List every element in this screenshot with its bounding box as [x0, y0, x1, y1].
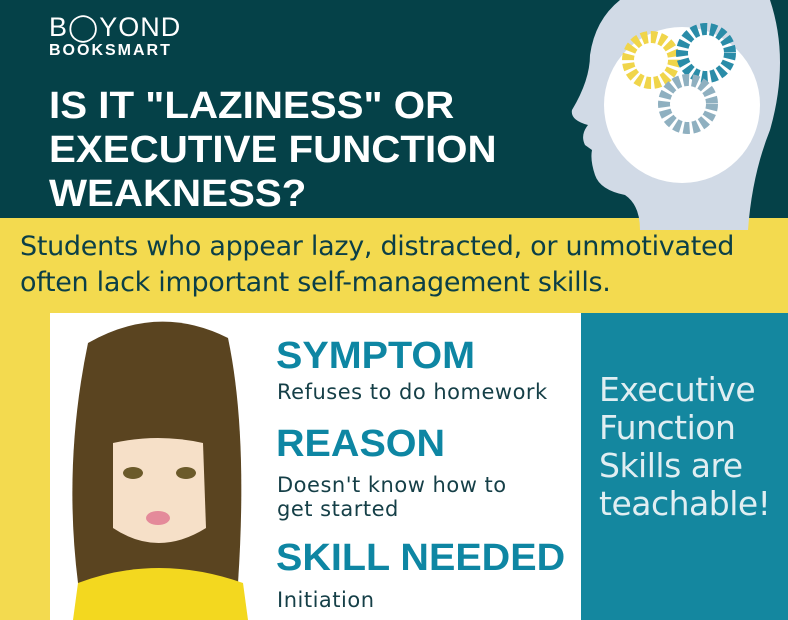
text: skill: Initiation [277, 588, 375, 612]
header band [0, 0, 788, 218]
title: IS IT "LAZINESS" OR [49, 85, 454, 127]
text: reason: Doesn't know how to [277, 473, 507, 497]
icon: head with gears [572, 0, 780, 230]
title [49, 85, 497, 215]
panel: teachable callout [581, 313, 788, 620]
subtitle text [20, 231, 734, 298]
logo [49, 12, 181, 59]
logo: B◯YOND [49, 12, 181, 42]
subtitle text: often lack important self-management skills. [20, 267, 611, 298]
panel: teachable callout: Skills are [599, 446, 743, 485]
title: WEAKNESS? [49, 173, 306, 215]
illustration: girl [72, 322, 248, 620]
panel: teachable callout: teachable! [599, 484, 770, 523]
logo: BOOKSMART [49, 42, 172, 59]
panel: teachable callout: Executive [599, 370, 755, 409]
heading: symptom: SYMPTOM [276, 335, 475, 377]
text: symptom: Refuses to do homework [277, 380, 548, 404]
text: reason [277, 473, 507, 521]
heading: skill needed: SKILL NEEDED [276, 537, 565, 579]
subtitle text: Students who appear lazy, distracted, or unmotivated [20, 231, 734, 262]
heading: reason: REASON [276, 423, 445, 465]
panel: teachable callout: Function [599, 408, 735, 447]
title: EXECUTIVE FUNCTION [49, 129, 497, 171]
text: reason: get started [277, 497, 399, 521]
panel: white content [50, 313, 581, 620]
